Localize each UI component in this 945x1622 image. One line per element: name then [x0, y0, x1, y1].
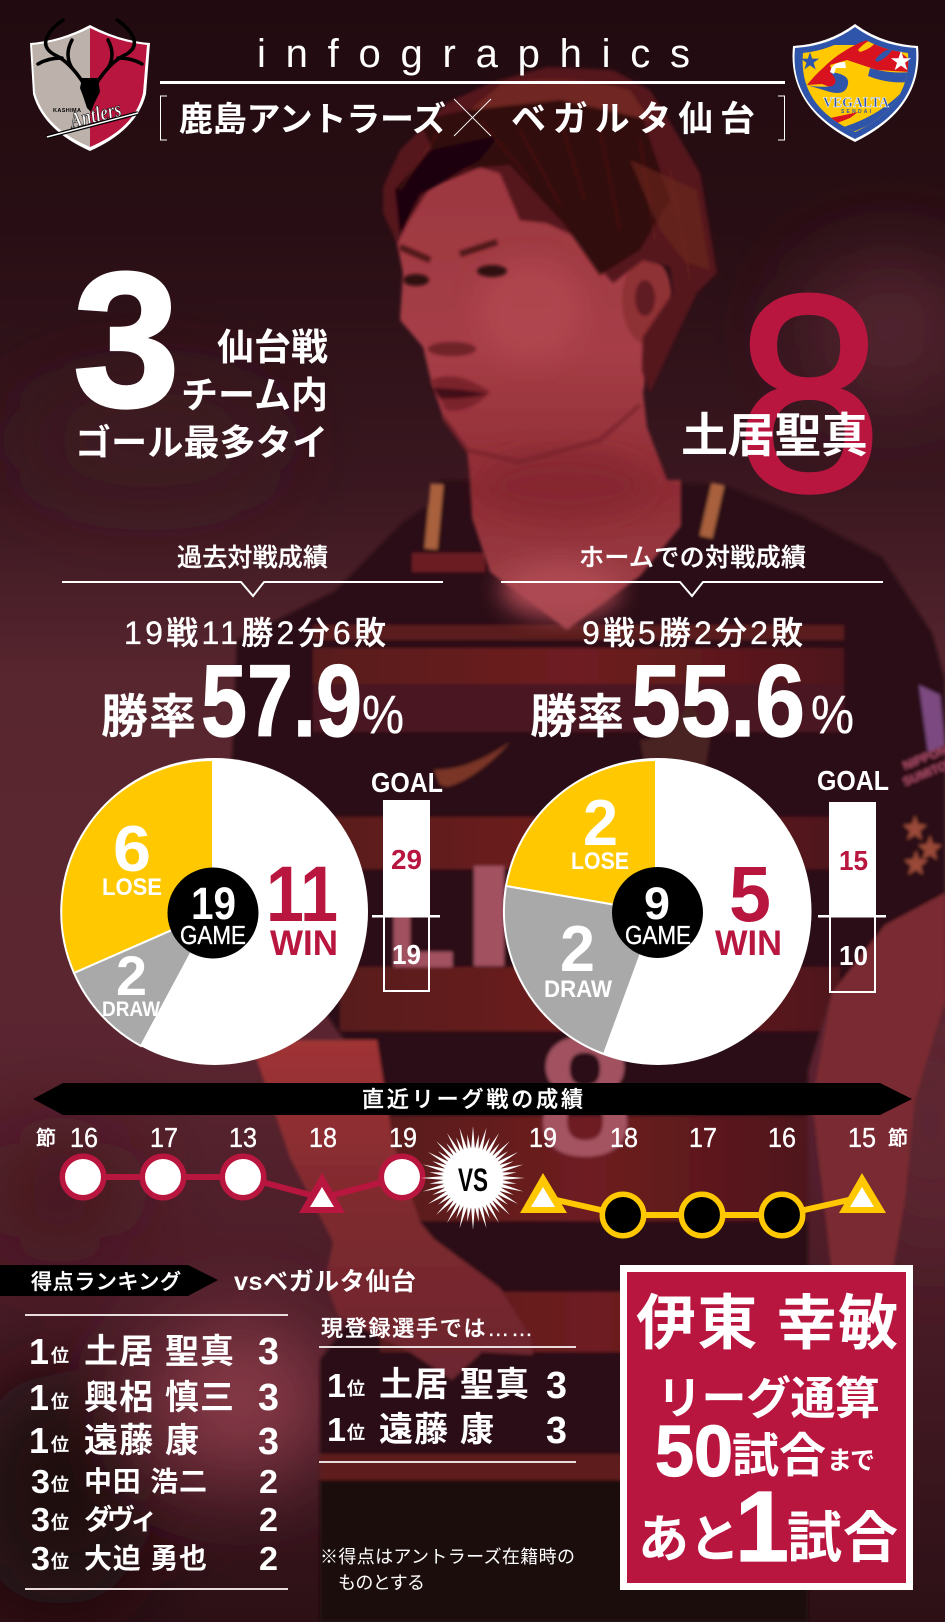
win rate: 勝率	[530, 690, 624, 743]
pie chart: 19	[191, 878, 236, 929]
ranking rows: 位	[51, 1552, 69, 1572]
pie chart: LOSE	[571, 848, 629, 875]
pie chart: 11	[266, 849, 338, 938]
ranking tag	[0, 1265, 218, 1296]
pie chart: DRAW	[544, 976, 612, 1003]
goal bar: 10	[839, 940, 868, 971]
left team form: 19	[389, 1122, 417, 1153]
callout: Ito milestone: 1	[735, 1471, 789, 1583]
squad rows: 遠藤 康	[379, 1411, 494, 1449]
logo wordmark: VEGALTA	[823, 95, 889, 111]
header	[160, 32, 785, 140]
collar	[431, 484, 437, 549]
pie chart: 5	[729, 849, 771, 938]
ranking rows: 2	[259, 1501, 278, 1538]
logo: Kashima Antlers: KASHIMA	[53, 108, 81, 114]
pie chart	[61, 758, 368, 1065]
pie chart: 2	[560, 912, 595, 985]
opponent label: vsベガルタ仙台	[234, 1268, 416, 1296]
player number and name: 土居聖真	[681, 409, 868, 462]
ranking rows: 位	[51, 1475, 69, 1495]
logo wordmark: Antlers	[66, 96, 124, 133]
stat: 3 goals: ゴール最多タイ	[75, 422, 328, 463]
left team form: 16	[70, 1122, 98, 1153]
section heading: ホームでの対戦成績	[579, 544, 806, 572]
player: neck and face	[397, 165, 681, 630]
match title: ベガルタ仙台	[511, 100, 755, 139]
callout: Ito milestone: 試合	[787, 1507, 898, 1569]
left team form: 17	[150, 1122, 178, 1153]
callout: Ito milestone: 試合	[732, 1429, 826, 1482]
right team form: 18	[610, 1122, 638, 1153]
footnote	[320, 1547, 575, 1593]
right team form: 17	[689, 1122, 717, 1153]
right team form: 15	[848, 1122, 876, 1153]
footnote: ものとする	[338, 1573, 425, 1593]
goal bar: 15	[839, 845, 868, 876]
pie chart: 2	[116, 944, 147, 1007]
player: hair	[383, 67, 717, 393]
section heading: 過去対戦成績	[177, 544, 328, 572]
ranking rows	[29, 1331, 279, 1577]
banner: 直近リーグ戦の成績	[362, 1087, 583, 1112]
logo: Vegalta Sendai: SENDAI	[841, 109, 872, 115]
goal bar	[371, 767, 443, 991]
left team form: 13	[229, 1122, 257, 1153]
ranking rows: 3	[31, 1501, 50, 1538]
ranking rows: 3	[31, 1540, 50, 1577]
stars	[801, 52, 819, 70]
logo: Vegalta Sendai	[793, 24, 918, 142]
left team form: 節	[36, 1127, 56, 1150]
win rate: 57.9	[201, 644, 362, 758]
ranking rows: 3	[258, 1377, 279, 1419]
squad rows: 土居 聖真	[379, 1366, 529, 1404]
right team form: 19	[529, 1122, 557, 1153]
squad rows	[327, 1365, 567, 1452]
panel: past record	[61, 544, 443, 1065]
callout: Ito milestone	[624, 1268, 910, 1586]
panel: home record	[501, 544, 889, 1065]
ranking rows: ダヴィ	[84, 1503, 158, 1535]
callout: Ito milestone: リーグ通算	[657, 1373, 880, 1424]
stat: 3 goals	[73, 232, 328, 463]
header: infographics: infographics	[257, 32, 690, 76]
banner	[33, 1083, 912, 1115]
match title	[179, 99, 755, 139]
section heading	[62, 544, 443, 596]
goal bar: GOAL	[371, 767, 443, 798]
stat: 3 goals: 3	[73, 232, 180, 447]
section heading	[501, 544, 883, 596]
right team form	[520, 1122, 908, 1236]
left team form	[36, 1122, 423, 1213]
pie chart	[504, 758, 812, 1065]
record text: 19戦11勝2分6敗	[124, 615, 386, 651]
ranking rows: 3	[31, 1463, 50, 1500]
panel: current squad ranking: 現登録選手では……	[321, 1316, 533, 1341]
squad rows: 位	[347, 1379, 365, 1399]
callout: Ito milestone: 50	[655, 1412, 733, 1492]
stat: 3 goals: 仙台戦	[217, 327, 328, 368]
ranking rows: 1	[29, 1420, 49, 1461]
ranking rows: 土居 聖真	[84, 1333, 234, 1371]
logo: Kashima Antlers	[30, 20, 150, 151]
pie chart: 2	[583, 786, 618, 859]
ranking rows: 遠藤 康	[84, 1422, 199, 1460]
footnote: ※得点はアントラーズ在籍時の	[320, 1547, 575, 1567]
left team form: 18	[309, 1122, 337, 1153]
ranking rows: 興梠 慎三	[84, 1379, 234, 1417]
panel: current squad ranking	[319, 1316, 576, 1593]
ranking rows: 位	[51, 1346, 69, 1366]
goal bar	[817, 765, 889, 992]
pie chart: DRAW	[102, 998, 160, 1021]
ranking rows: 1	[29, 1377, 49, 1418]
ranking rows: 位	[51, 1392, 69, 1412]
ranking rows: 2	[259, 1463, 278, 1500]
player: facial features	[400, 242, 507, 411]
panel: recent league results	[33, 1083, 912, 1236]
win rate	[530, 644, 854, 758]
player: arms	[812, 893, 945, 1275]
pie chart: 9	[644, 878, 670, 929]
record text: 9戦5勝2分2敗	[582, 615, 803, 651]
shirt lettering: 8	[538, 1002, 632, 1192]
squad rows: 位	[347, 1423, 365, 1443]
pie chart: GAME	[625, 920, 691, 950]
player number and name: 8	[736, 238, 882, 550]
ranking rows: 3	[258, 1421, 279, 1463]
sleeve patch and sponsor	[919, 685, 945, 752]
player number and name	[681, 238, 882, 550]
ranking rows: 位	[51, 1435, 69, 1455]
ranking rows: 位	[51, 1513, 69, 1533]
pie chart: LOSE	[102, 874, 162, 901]
ranking rows: 中田 浩二	[84, 1466, 207, 1497]
pie chart: WIN	[270, 924, 338, 963]
squad rows: 1	[327, 1367, 346, 1404]
shirt lettering: L	[386, 844, 456, 997]
ranking rows: 1	[29, 1331, 49, 1372]
win rate: %	[811, 685, 854, 745]
win rate: 55.6	[631, 644, 805, 758]
callout: Ito milestone: 伊東 幸敏	[636, 1290, 898, 1357]
goal bar: GOAL	[817, 765, 889, 796]
goal bar: 19	[392, 939, 421, 970]
ranking rows: 3	[258, 1331, 279, 1373]
ranking rows: 大迫 勇也	[84, 1543, 207, 1574]
ranking rows: 2	[259, 1540, 278, 1577]
pie chart: GAME	[180, 920, 246, 950]
pie chart: WIN	[715, 924, 782, 963]
shirt lettering	[386, 844, 632, 1192]
player: shirt	[200, 480, 945, 1622]
VS burst	[421, 1126, 525, 1230]
callout: Ito milestone: まで	[827, 1447, 875, 1475]
match title: 鹿島アントラーズ	[179, 100, 446, 139]
win rate: 勝率	[101, 690, 196, 743]
squad rows: 3	[546, 1410, 567, 1452]
win rate	[101, 644, 404, 758]
right team form: 節	[888, 1127, 908, 1150]
squad rows: 1	[327, 1411, 346, 1448]
callout: Ito milestone: あと	[638, 1511, 740, 1568]
panel: scoring ranking	[0, 1265, 416, 1590]
win rate: %	[362, 685, 404, 745]
goal bar: 29	[391, 844, 422, 875]
stat: 3 goals: チーム内	[181, 375, 328, 416]
ranking tag: 得点ランキング	[31, 1271, 181, 1294]
VS burst: VS	[458, 1162, 488, 1198]
right team form: 16	[768, 1122, 796, 1153]
squad rows: 3	[546, 1365, 567, 1407]
pie chart: 6	[113, 812, 151, 885]
